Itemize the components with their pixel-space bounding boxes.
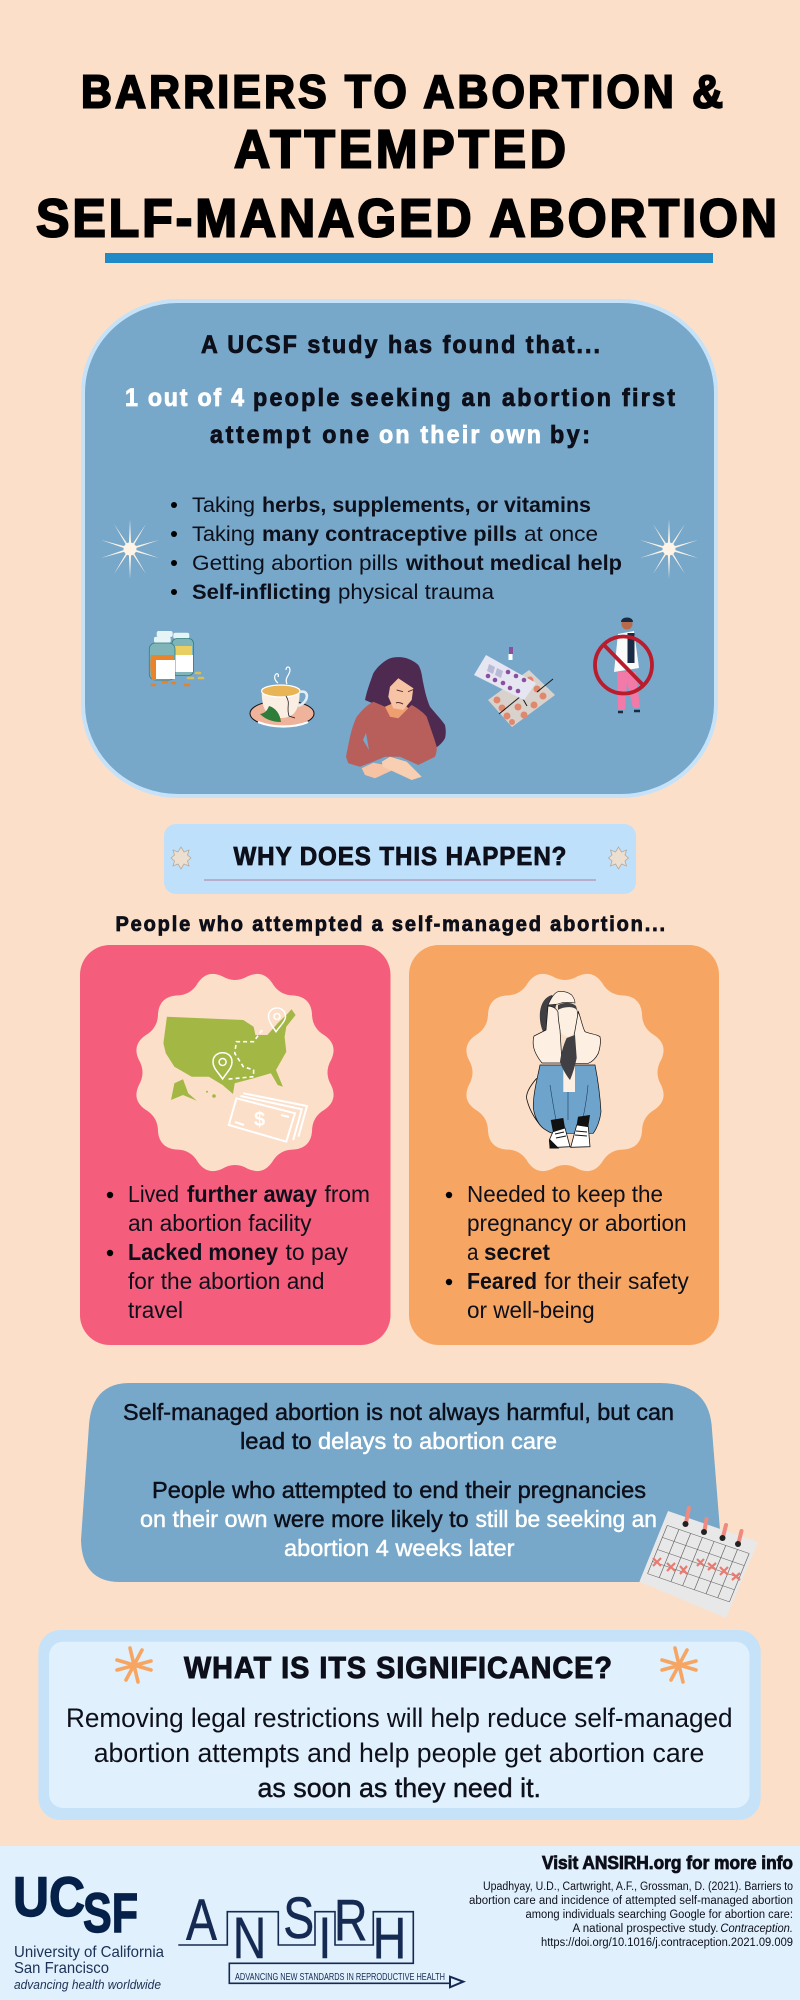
- text: delays statement: Self-managed abortion is not always harmful, but can: [123, 1399, 674, 1425]
- text: likelihood statement: People who attempted to end their pregnancies: [152, 1477, 646, 1503]
- text: secrecy and fear barriers: for their safety: [544, 1268, 689, 1294]
- logo: UCSF: San Francisco: [14, 1960, 109, 1977]
- method bullet list: many contraceptive pills: [262, 523, 517, 546]
- icon: US map with route and money: [163, 1008, 307, 1142]
- text: likelihood statement: on their own: [140, 1506, 268, 1532]
- logo: UCSF: UC: [13, 1865, 85, 1928]
- text: distance and money barriers: an abortion facility: [128, 1210, 312, 1236]
- citation: Contraception.: [720, 1923, 793, 1935]
- icon: distressed person sitting: [527, 991, 601, 1148]
- heading: what is its significance: WHAT IS ITS SIGNIFICANCE?: [184, 1651, 612, 1685]
- method bullet list: Getting abortion pills: [192, 552, 398, 575]
- text: secrecy and fear barriers: secret: [484, 1239, 550, 1265]
- text: distance and money barriers: Lived: [128, 1181, 179, 1207]
- text: delays statement: [123, 1399, 674, 1454]
- panel: distance and money card: [80, 945, 390, 1345]
- citation: among individuals searching Google for abortion care:: [526, 1909, 793, 1921]
- logo: UCSF: SF: [83, 1881, 138, 1944]
- method bullet list: herbs, supplements, or vitamins: [262, 494, 591, 517]
- text: likelihood statement: were more likely to: [273, 1506, 469, 1532]
- text: significance statement: as soon as they need it.: [258, 1773, 541, 1803]
- text: distance and money barriers: from: [324, 1181, 370, 1207]
- title: [36, 67, 777, 249]
- text: likelihood statement: abortion 4 weeks later: [284, 1535, 515, 1561]
- heading: why does this happen: WHY DOES THIS HAPPEN?: [234, 842, 566, 871]
- icon: orange asterisk right: [662, 1648, 696, 1682]
- icon: sparkle left: [101, 519, 159, 579]
- one in four statement: 1 out of 4: [125, 384, 245, 412]
- text: secrecy and fear barriers: [446, 1181, 689, 1323]
- text: distance and money barriers: [107, 1181, 370, 1323]
- study heading: A UCSF study has found that...: [201, 331, 600, 359]
- title underline bar: [105, 253, 713, 263]
- text: delays statement: delays to abortion care: [318, 1428, 557, 1454]
- method bullet list: Self-inflicting: [192, 581, 331, 604]
- logo: UCSF: University of California: [14, 1944, 164, 1961]
- method bullet list: at once: [524, 523, 598, 546]
- panel: why heading: [164, 824, 636, 894]
- scallop badge: [466, 974, 664, 1171]
- one in four statement: attempt one: [210, 421, 369, 449]
- text: distance and money barriers: travel: [128, 1297, 183, 1323]
- text: secrecy and fear barriers: or well-being: [467, 1297, 595, 1323]
- text: distance and money barriers: to pay: [286, 1239, 348, 1265]
- logo: UCSF: advancing health worldwide: [14, 1977, 161, 1992]
- icon: calendar: [639, 1508, 758, 1618]
- text: secrecy and fear barriers: Needed to keep the: [467, 1181, 663, 1207]
- text: significance statement: [66, 1703, 733, 1803]
- title: SELF-MANAGED ABORTION: [36, 189, 777, 249]
- text: distance and money barriers: for the abortion and: [128, 1268, 324, 1294]
- title: ATTEMPTED: [234, 120, 566, 180]
- one in four statement: [125, 384, 675, 449]
- icon: small star right: [608, 847, 628, 869]
- citation: abortion care and incidence of attempted self-managed abortion: [469, 1895, 793, 1907]
- icon: sad woman: [346, 657, 446, 780]
- panel: study findings: [83, 301, 716, 796]
- panel: delays to care: [81, 1383, 758, 1618]
- panel: secrecy and fear card: [409, 945, 719, 1345]
- logo: ANSIRH: [178, 1886, 463, 1987]
- text: significance statement: Removing legal restrictions will help reduce self-managed: [66, 1703, 733, 1733]
- method bullet list: physical trauma: [338, 581, 494, 604]
- text: distance and money barriers: Lacked money: [128, 1239, 278, 1265]
- icon: sparkle right: [640, 519, 698, 579]
- text: secrecy and fear barriers: Feared: [467, 1268, 537, 1294]
- citation: A national prospective study.: [572, 1923, 718, 1935]
- icon: small star left: [171, 847, 191, 869]
- citation: https://doi.org/10.1016/j.contraception.2021.09.009: [541, 1937, 793, 1949]
- citation: [469, 1881, 793, 1949]
- method bullet list: [171, 494, 622, 604]
- text: likelihood statement: still be seeking an: [476, 1506, 657, 1532]
- text: likelihood statement: [140, 1477, 657, 1561]
- title: BARRIERS TO ABORTION &: [81, 67, 723, 118]
- method bullet list: Taking: [192, 494, 255, 517]
- logo: ANSIRH: ANSIRH: [186, 1886, 406, 1971]
- method bullet list: without medical help: [405, 552, 622, 575]
- text: significance statement: abortion attempts and help people get abortion care: [94, 1738, 704, 1768]
- one in four statement: people seeking an abortion first: [253, 384, 675, 412]
- icon: herbal tea cup: [250, 667, 314, 726]
- icon: orange asterisk left: [117, 1648, 151, 1682]
- icon: US map with route and money: $: [254, 1109, 265, 1131]
- call to action: Visit ANSIRH.org for more info: [542, 1853, 793, 1873]
- panel: significance: [38, 1630, 761, 1820]
- subheading: people who attempted: People who attempted a self-managed abortion...: [116, 912, 665, 936]
- icon: crossed-out doctor: [595, 618, 652, 712]
- one in four statement: by:: [550, 421, 590, 449]
- icon: contraceptive pill packs: [474, 647, 555, 727]
- text: distance and money barriers: further away: [187, 1181, 317, 1207]
- scallop badge: [136, 974, 334, 1171]
- logo: ANSIRH: ADVANCING NEW STANDARDS IN REPRODUCTIVE HEALTH: [235, 1972, 445, 1983]
- one in four statement: on their own: [379, 421, 541, 449]
- footer: [0, 1846, 800, 2000]
- method bullet list: Taking: [192, 523, 255, 546]
- logo: UCSF: [13, 1865, 164, 1992]
- text: secrecy and fear barriers: pregnancy or abortion: [467, 1210, 687, 1236]
- text: secrecy and fear barriers: a: [467, 1239, 479, 1265]
- text: delays statement: lead to: [240, 1428, 312, 1454]
- icon: supplement bottles: [149, 631, 203, 685]
